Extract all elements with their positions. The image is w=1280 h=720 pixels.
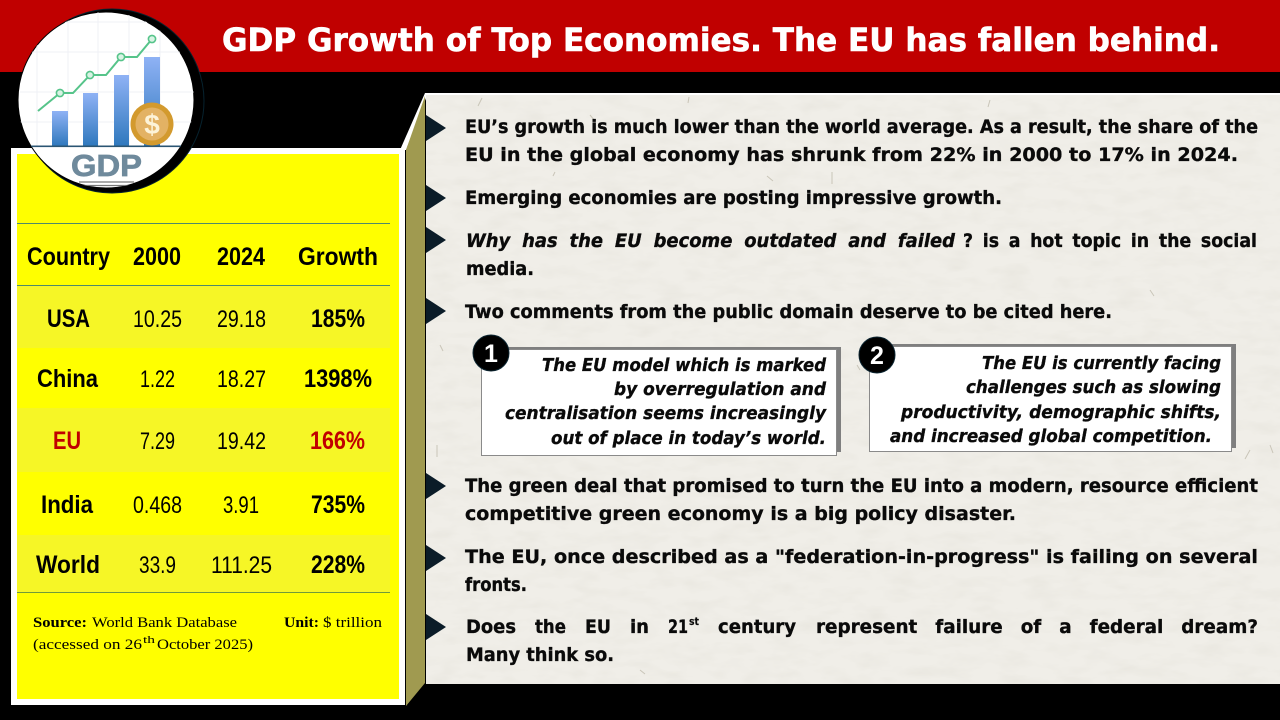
row: China	[37, 365, 372, 393]
row: EU: 7.29	[140, 428, 175, 455]
title: GDP Growth of Top Economies. The EU has fallen behind.	[222, 21, 1220, 59]
table row bands	[17, 223, 390, 593]
callout: comment 2: challenges such as slowing	[966, 377, 1221, 398]
text block: federal dream: in	[630, 616, 649, 638]
text block: emerging economies: Emerging economies are posting impressive growth.	[465, 187, 1002, 209]
panel: bevel between table and commentary	[400, 93, 428, 706]
icon: number badge 1	[473, 335, 509, 371]
row: China: 18.27	[217, 366, 266, 393]
text block: federation in progress	[465, 546, 1258, 596]
row: India: 0.468	[133, 492, 182, 519]
panel: yellow table card	[11, 148, 405, 705]
table header: 2000	[133, 243, 181, 271]
text block: green deal: The green deal that promised to turn the EU into a modern, resource efficient	[465, 475, 1258, 497]
text block: hot topic: ? is a hot topic in the social	[963, 230, 1257, 252]
text block: two comments: Two comments from the public domain deserve to be cited here.	[465, 301, 1112, 323]
callout: comment 1: out of place in today’s world.	[551, 428, 826, 449]
source note: Source:	[33, 615, 87, 631]
row: China: 1.22	[140, 366, 175, 393]
unit note: $ trillion	[323, 615, 383, 631]
text block: hot topic: Why has the EU become outdated and failed	[466, 230, 955, 252]
source note: World Bank Database	[92, 615, 237, 631]
source note	[33, 615, 253, 653]
text block: federal dream: Does	[466, 616, 516, 638]
text block: federal dream: st	[689, 615, 699, 628]
text block: green deal: competitive green economy is a big policy disaster.	[465, 503, 1016, 525]
text block: federal dream: represent failure of a federal dream?	[816, 616, 1258, 638]
row: World: 111.25	[211, 552, 272, 579]
text block: green deal	[465, 475, 1258, 525]
row: World: World	[36, 551, 100, 579]
row: World: 228%	[311, 551, 365, 579]
table header: Growth	[298, 243, 378, 271]
unit note: Unit:	[284, 615, 319, 631]
unit note	[284, 615, 383, 631]
icon: number badge 2	[859, 337, 895, 373]
row: EU: 19.42	[217, 428, 266, 455]
row: USA: USA	[47, 305, 90, 333]
row: China: 1398%	[304, 365, 372, 393]
text block: federal dream: 21	[668, 616, 688, 638]
text block: federal dream: century	[718, 616, 797, 638]
row: India	[41, 491, 365, 519]
row: USA: 10.25	[133, 306, 182, 333]
text block: hot topic: media.	[466, 258, 534, 280]
row: World	[36, 551, 365, 579]
row: India: 3.91	[223, 492, 259, 519]
icon: GDP logo circle: $	[144, 109, 160, 140]
callout: comment 1	[473, 335, 841, 456]
row: India: 735%	[311, 491, 365, 519]
text block: EU share of world economy: EU in the global economy has shrunk from 22% in 2000 to 17% in 2024.	[465, 144, 1238, 166]
text block: hot topic	[466, 230, 1257, 280]
icon: number badge 2: 2	[870, 342, 884, 370]
row: World: 33.9	[139, 552, 176, 579]
callout: comment 2: productivity, demographic shifts,	[900, 402, 1221, 423]
row: USA	[47, 305, 365, 333]
text block: federation in progress: fronts.	[465, 574, 527, 596]
text block: federal dream: EU	[585, 616, 611, 638]
row: USA: 29.18	[217, 306, 266, 333]
text block: federation in progress: The EU, once described as a "federation-in-progress" is failing on several	[465, 546, 1258, 568]
source note: (accessed on 26	[33, 637, 143, 653]
row: EU: 166%	[310, 427, 365, 455]
icon: number badge 1: 1	[484, 340, 498, 368]
icon: bullet arrows	[426, 115, 446, 640]
header banner	[0, 0, 1280, 72]
row: EU	[53, 427, 365, 455]
icon: GDP logo circle: GDP	[71, 148, 142, 183]
callout: comment 2: and increased global competition.	[890, 426, 1212, 447]
callout: comment 2: The EU is currently facing	[982, 353, 1221, 374]
icon: GDP logo circle	[18, 0, 204, 193]
source note: October 2025)	[157, 637, 253, 653]
table header	[27, 243, 378, 271]
row: EU: EU	[53, 427, 81, 455]
text block: federal dream	[466, 615, 1258, 666]
source note: th	[143, 635, 155, 646]
callout: comment 1: The EU model which is marked	[542, 355, 827, 376]
row: USA: 185%	[311, 305, 365, 333]
text block: EU share of world economy	[465, 116, 1258, 166]
callout: comment 1: centralisation seems increasingly	[505, 403, 827, 424]
panel: commentary paper	[425, 93, 1280, 684]
callout: comment 2	[859, 337, 1236, 452]
callout: comment 1: by overregulation and	[614, 379, 827, 400]
table header: Country	[27, 243, 110, 271]
row: China: China	[37, 365, 99, 393]
text block: federal dream: the	[535, 616, 566, 638]
row: India: India	[41, 491, 94, 519]
table header: 2024	[217, 243, 265, 271]
text block: federal dream: Many think so.	[466, 644, 614, 666]
